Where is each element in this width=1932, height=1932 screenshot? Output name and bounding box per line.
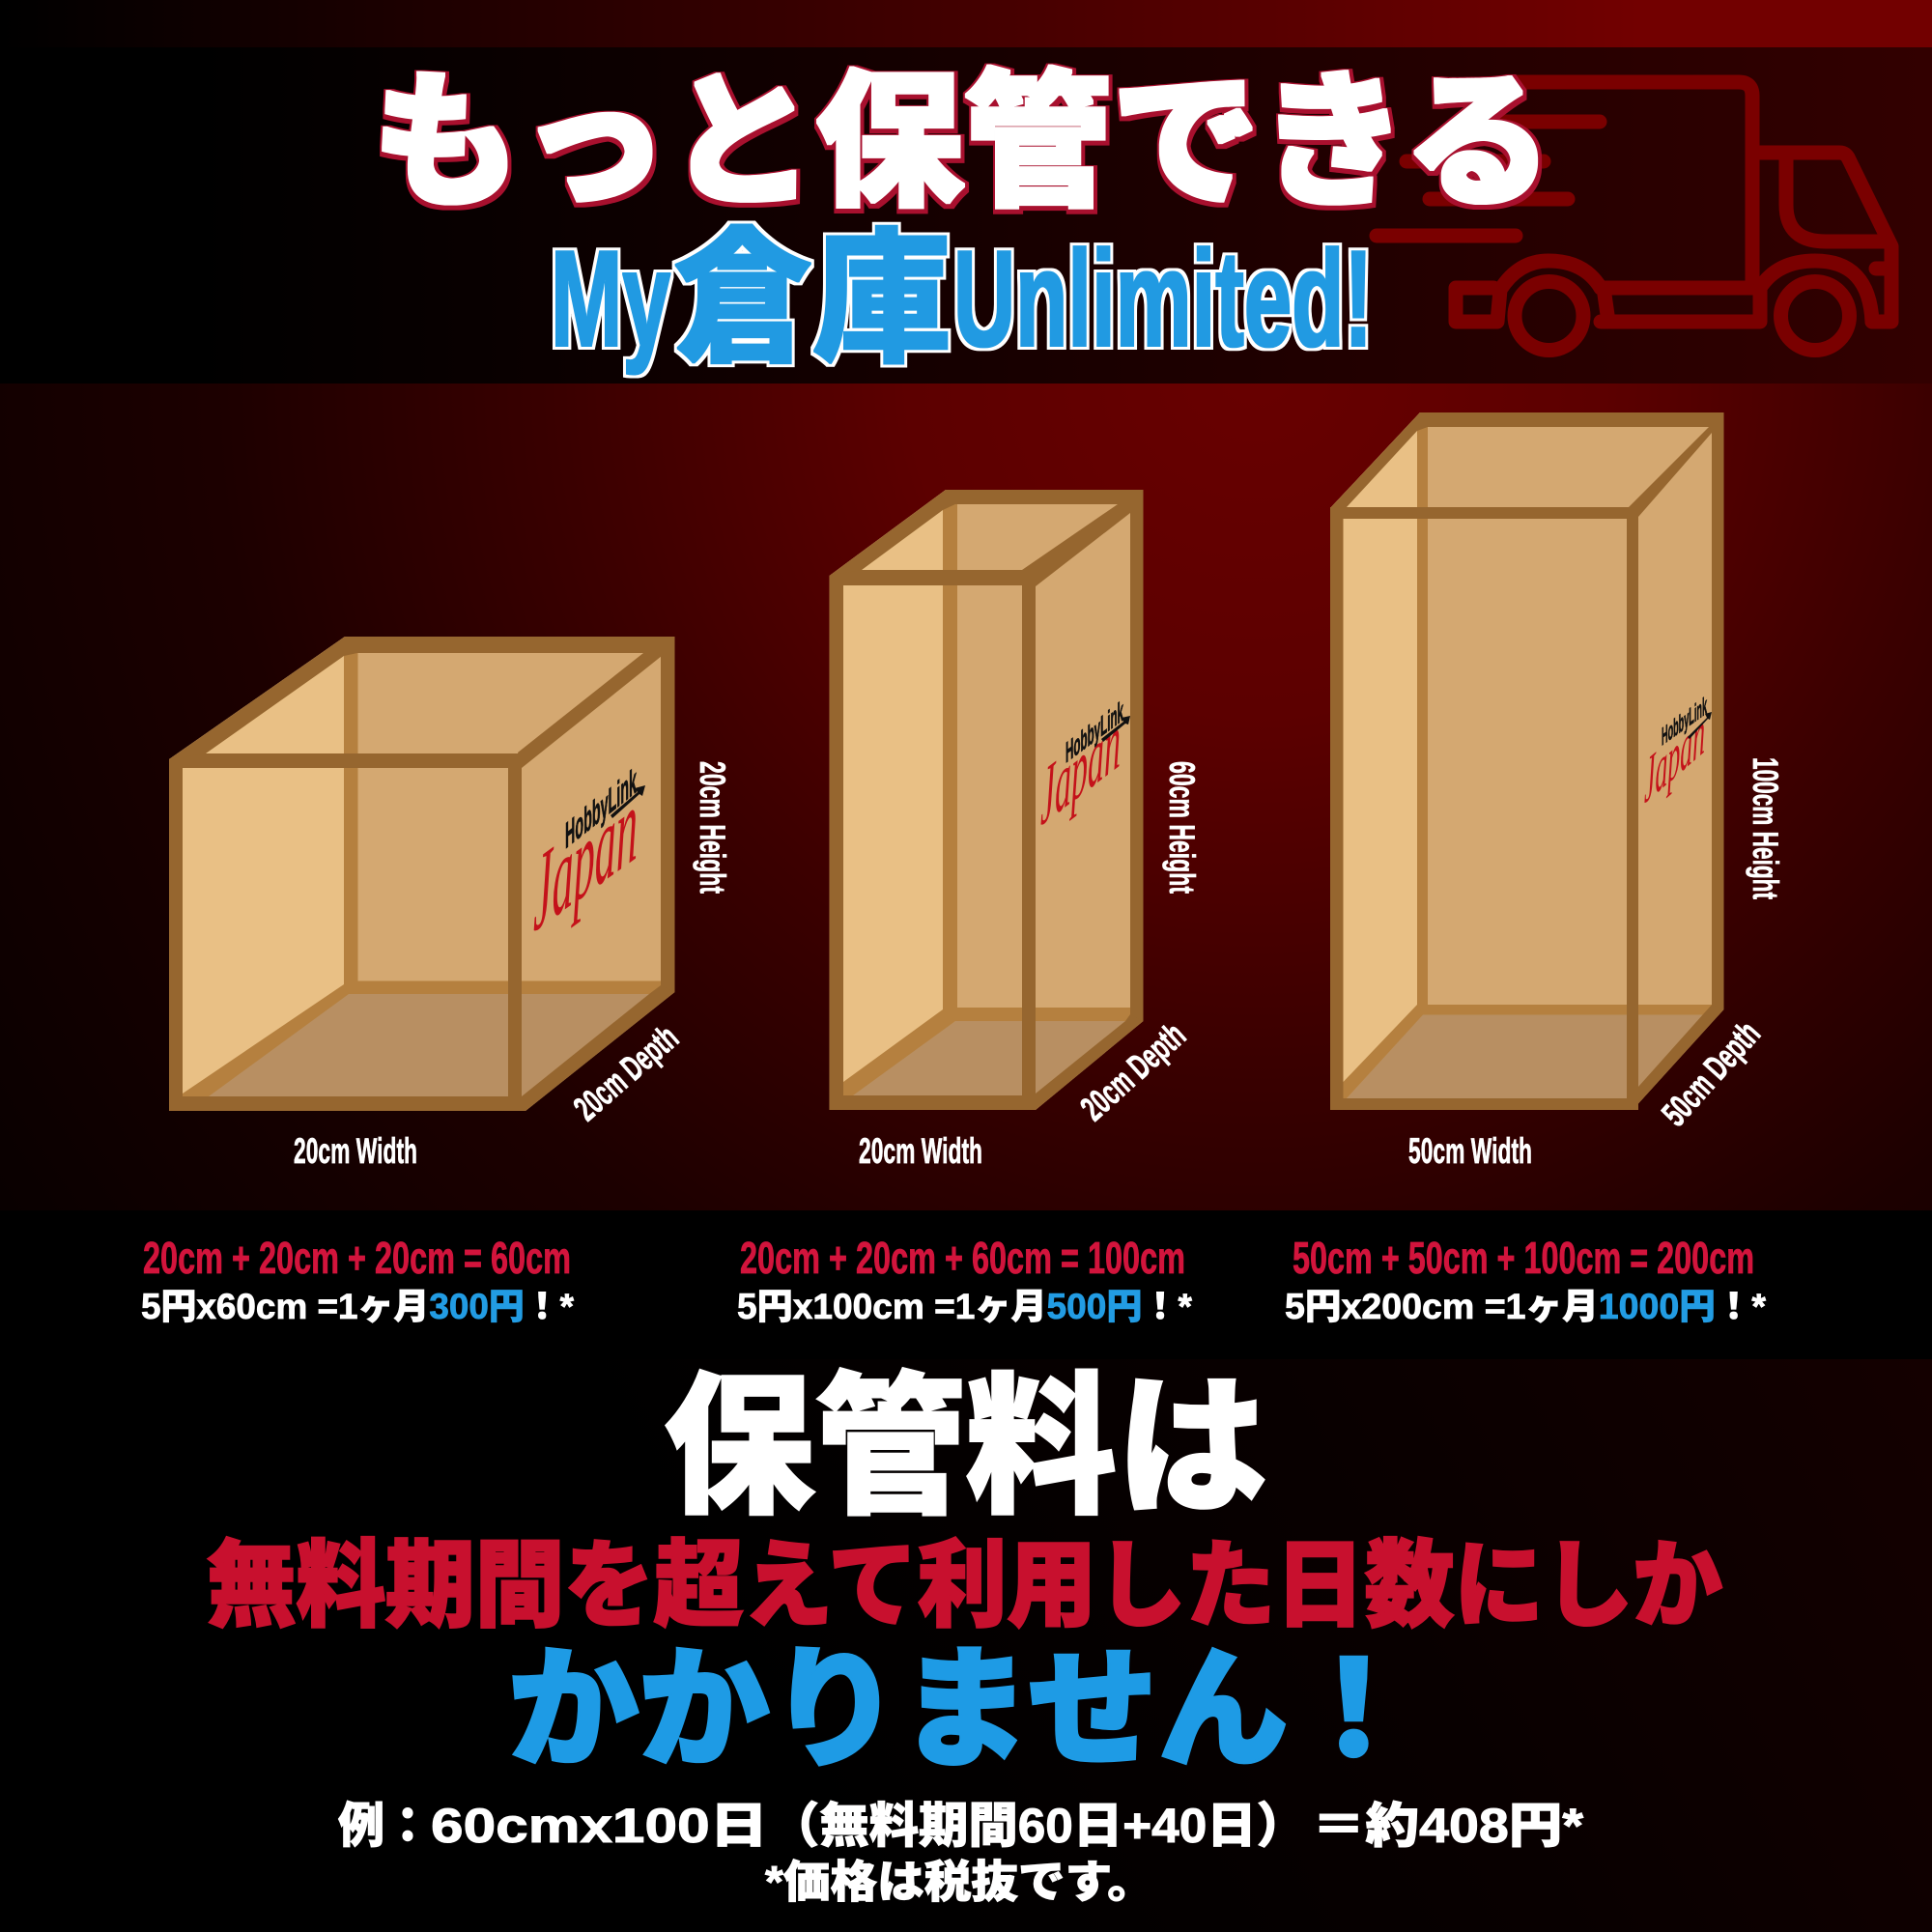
- box 1: 20x20x20 cardboard box: Japan: [533, 761, 638, 956]
- subtitle part: My: My: [551, 222, 670, 376]
- box 3: 50x50x100 cardboard box: [1330, 412, 1723, 1110]
- heading: かかりません！: かかりません！: [508, 1636, 1419, 1783]
- box 2: 20x20x60 cardboard box: Japan: [1040, 693, 1121, 843]
- heading: 無料期間を超えて利用した日数にしか: 無料期間を超えて利用した日数にしか: [207, 1532, 1722, 1638]
- price: box 3: 5円x200cm =1ヶ月1000円！*: [1285, 1287, 1767, 1326]
- example text: 例：: [338, 1799, 431, 1853]
- box 1: 20x20x20 cardboard box: HobbyLink: [565, 759, 637, 858]
- label: box 3 height: 100cm Height: [1746, 757, 1785, 899]
- label: box 1 depth: 20cm Depth: [566, 1017, 686, 1128]
- footnote: *価格は税抜です。: [765, 1857, 1154, 1907]
- background: header band: [0, 47, 1932, 384]
- text: HobbyLink: [1662, 692, 1707, 752]
- box 2: 20x20x60 cardboard box: HobbyLink: [1065, 694, 1123, 770]
- logo: HobbyLink Japan on box 1: [533, 759, 645, 956]
- subtitle part: Unlimited!: Unlimited!: [953, 222, 1373, 376]
- label: box 2 height: 60cm Height: [1162, 761, 1202, 894]
- label: box 2 width: 20cm Width: [859, 1131, 982, 1171]
- subtitle part: 倉庫: 倉庫: [673, 218, 952, 381]
- price: box 1: 5円x60cm =1ヶ月300円！*: [141, 1287, 575, 1326]
- box 1: 20x20x20 cardboard box: [169, 637, 674, 1111]
- logo: HobbyLink Japan on box 3: [1644, 692, 1712, 818]
- label: box 1 width: 20cm Width: [294, 1131, 417, 1171]
- box 3: 50x50x100 cardboard box: Japan: [1644, 695, 1705, 818]
- subtitle: My倉庫Unlimited!: [551, 218, 1373, 381]
- background: boxes panel: [0, 384, 1932, 1210]
- formula: box 3 sum: 50cm + 50cm + 100cm = 200cm: [1293, 1233, 1754, 1283]
- label: box 3 depth: 50cm Depth: [1654, 1013, 1768, 1133]
- title: もっと保管できる: もっと保管できる: [372, 61, 1552, 225]
- example text: ＝約408円*: [1312, 1799, 1584, 1853]
- example text: 60cmx100日: [431, 1799, 768, 1853]
- price: box 2: 5円x100cm =1ヶ月500円！*: [737, 1287, 1193, 1326]
- formula: box 2 sum: 20cm + 20cm + 60cm = 100cm: [740, 1233, 1185, 1283]
- label: box 1 height: 20cm Height: [693, 761, 732, 894]
- background: lower panel: [0, 1359, 1932, 1932]
- formula: box 1 sum: 20cm + 20cm + 20cm = 60cm: [143, 1233, 571, 1283]
- background: formula band: [0, 1210, 1932, 1359]
- icon: delivery truck watermark: [1377, 82, 1891, 350]
- label: box 3 width: 50cm Width: [1408, 1131, 1532, 1171]
- example text: （無料期間60日+40日）: [770, 1799, 1306, 1853]
- label: box 2 depth: 20cm Depth: [1073, 1014, 1193, 1128]
- example text: [338, 1799, 1584, 1853]
- logo: HobbyLink Japan on box 2: [1040, 693, 1130, 843]
- heading: 保管料は: 保管料は: [664, 1363, 1267, 1533]
- background: top red band: [0, 0, 1932, 47]
- box 2: 20x20x60 cardboard box: [830, 490, 1144, 1110]
